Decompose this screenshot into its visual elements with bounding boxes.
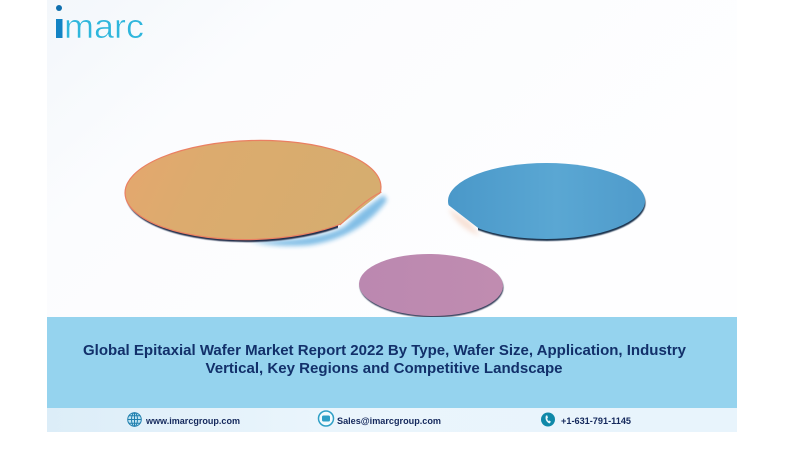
title: Global Epitaxial Wafer Market Report 2022 By Type, Wafer Size, Application, Industry [83,343,686,359]
wafer: pink [358,253,504,319]
title band [47,317,737,408]
icon: email [318,411,334,426]
icon: phone [541,412,555,426]
photo background [47,0,737,317]
wafer: large gold [124,137,387,246]
wafer: blue [448,163,646,241]
email address: Sales@imarcgroup.com [337,416,441,426]
title [83,343,686,377]
logo: imarc: marc [64,8,144,46]
contact bar [47,408,737,432]
icon: globe [128,413,141,426]
phone number: +1-631-791-1145 [561,416,631,426]
title: Vertical, Key Regions and Competitive Landscape [206,361,562,377]
website: www.imarcgroup.com [145,416,240,426]
